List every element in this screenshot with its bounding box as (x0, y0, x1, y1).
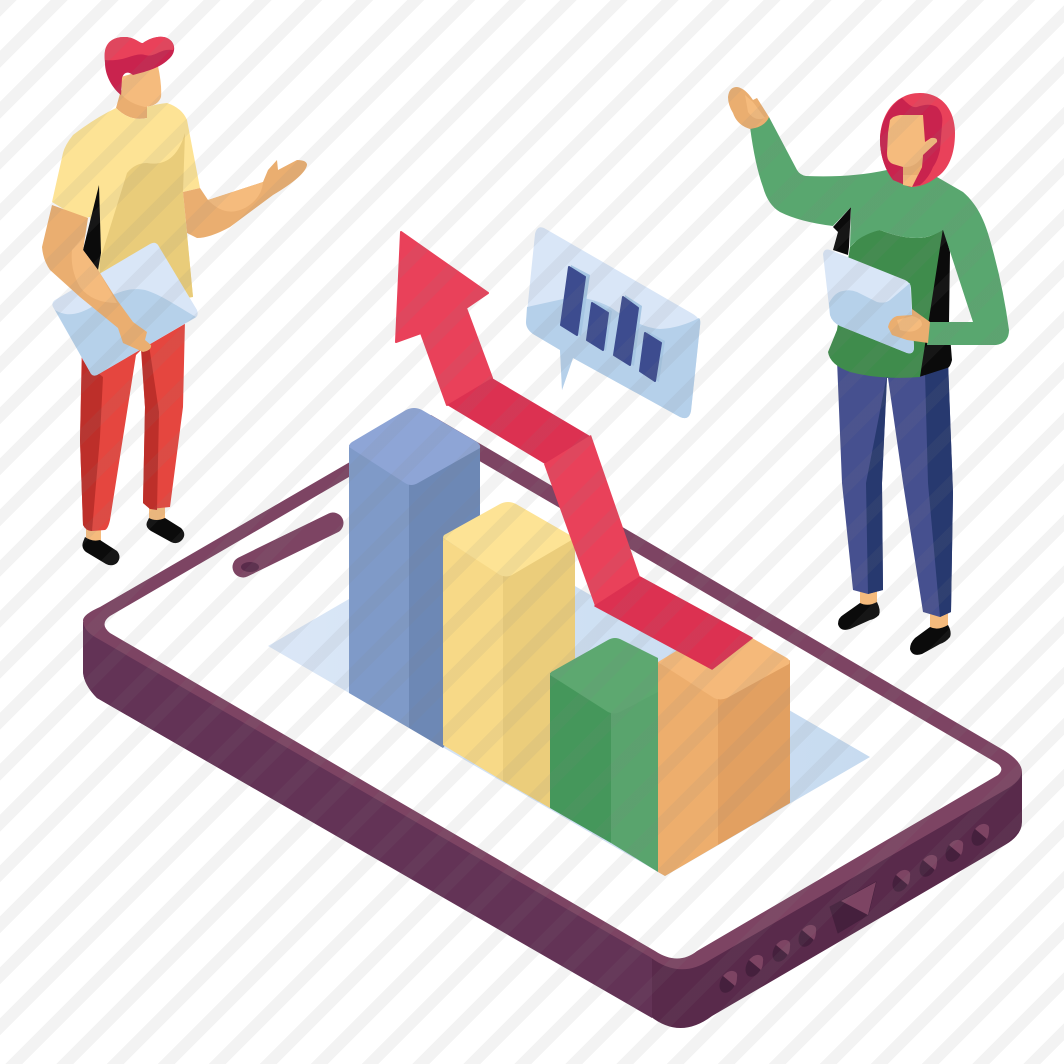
woman hair (880, 93, 955, 187)
bubble bar shadows (563, 265, 665, 382)
woman sweater body (828, 228, 943, 378)
man shirt (52, 103, 200, 320)
woman trousers (837, 360, 953, 617)
woman face (887, 115, 937, 187)
speaker slot (241, 523, 333, 572)
speaker dots right highlights (896, 824, 989, 885)
speech bubble with mini chart (526, 227, 700, 418)
man face (121, 66, 161, 107)
phone screen (104, 431, 1001, 958)
man shirt shadow gap (83, 185, 101, 270)
woman left foot (838, 590, 880, 630)
phone rim (83, 415, 1022, 969)
yellow bar (443, 502, 575, 808)
woman holding hand (888, 309, 930, 343)
woman tablet (823, 250, 914, 353)
speaker dots left highlights (723, 925, 816, 986)
bubble shade (526, 298, 700, 418)
man trousers (80, 320, 185, 531)
second segment (447, 378, 590, 464)
red growth arrow (396, 232, 752, 669)
speaker dots right (889, 821, 992, 895)
phone side wall (83, 622, 1022, 1028)
blue bar (349, 408, 480, 748)
man right foot (146, 506, 184, 543)
third segment (544, 435, 640, 606)
bar chart (349, 408, 790, 876)
woman raised hand (728, 87, 769, 129)
man left foot (82, 526, 120, 565)
green bar (550, 638, 658, 872)
man hair (105, 37, 174, 95)
bubble bars (561, 267, 661, 381)
speaker dots left (716, 922, 819, 996)
man tablet (52, 243, 198, 376)
chart floor (268, 527, 870, 876)
woman (728, 87, 1009, 655)
man raised arm (183, 160, 307, 238)
woman sweater upper with arms (750, 117, 1009, 345)
woman right foot (910, 612, 951, 655)
man neck (116, 90, 147, 119)
phone (83, 415, 1022, 1028)
phone long side lighter wall (83, 622, 652, 1018)
woman shirt shadow gaps (833, 207, 952, 377)
orange bar (658, 622, 790, 876)
woman neck shadow (903, 157, 922, 175)
bubble body (526, 227, 700, 418)
home button (830, 882, 876, 933)
fourth segment (595, 577, 752, 669)
man (42, 37, 307, 565)
arrow head and first segment (396, 232, 492, 405)
man holding arm (42, 205, 151, 352)
